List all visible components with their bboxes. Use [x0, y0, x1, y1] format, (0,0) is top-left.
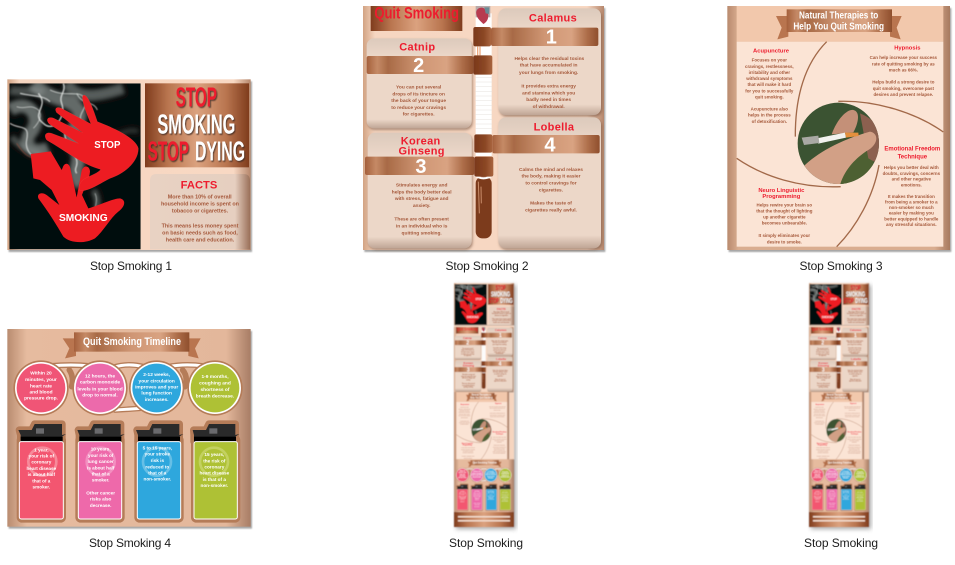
text: Emotional Freedom Technique: and other negative [892, 177, 932, 182]
card: Lobella: Lobella [534, 121, 575, 133]
circle: 2-12 weeks: your circulation [139, 378, 175, 384]
circle: 1-9 months [187, 360, 243, 416]
facts text: tobacco or cigarettes. [172, 209, 229, 215]
card: Lobella: cigarettes. [539, 187, 564, 193]
lighter: 5 to 15 years: your stroke [145, 452, 170, 457]
panel: smoke photo with red hands [9, 83, 141, 249]
lighter: 1 year: your risk of [29, 454, 54, 459]
lighter: 1 year: smoker. [33, 484, 50, 489]
card: Catnip: drops of its tincture on [392, 91, 445, 97]
central tube [474, 6, 493, 238]
card: Catnip: the back of your tongue [391, 98, 446, 104]
text: Acupuncture: quit smoking. [755, 94, 784, 99]
facts text: More than 10% of overall [168, 195, 232, 201]
text: Acupuncture: helps in the process [748, 113, 791, 118]
text: Acupuncture: Acupuncture [753, 48, 790, 54]
card: Lobella: the body, making it easier [522, 174, 581, 180]
lighter: 15 years: non-smoker. [200, 483, 228, 488]
circle: 20 minutes: minutes, your [25, 377, 57, 383]
text: Emotional Freedom Technique: It makes the transition [888, 194, 935, 199]
circle: 12 hours: levels in your blood [77, 386, 123, 392]
card: Calamus: It provides extra energy [521, 83, 576, 89]
card: Catnip: for cigarettes. [403, 112, 435, 118]
card: Korean Ginseng: helps the body better deal [392, 190, 452, 196]
thumbnail: Stop Smoking 4 [7, 329, 252, 529]
facts text [161, 195, 239, 243]
card: Calamus: your lungs from smoking. [519, 70, 579, 76]
panel: facts [150, 174, 250, 249]
text: Neuro Linguistic Programming: that the thought of lighting [756, 209, 813, 214]
ribbon heading [63, 332, 201, 358]
card: Korean Ginseng: anxiety. [413, 203, 431, 209]
text: Hypnosis: rate of quitting smoking by as [872, 61, 935, 66]
lighter: 10 years: risks also [90, 497, 112, 502]
card: Calamus: Calamus [529, 13, 577, 25]
lighter: 15 years: heart disease [199, 471, 230, 476]
text: Emotional Freedom Technique [883, 147, 941, 227]
circle: 12 hours: carbon monoxide [80, 380, 120, 386]
hand label SMOKING: SMOKING [59, 213, 108, 224]
lighter: 1 year: that of a [32, 478, 51, 483]
heading banner: Quit Smoking [371, 3, 462, 31]
card: Calamus [473, 8, 601, 115]
text: Acupuncture: that will make it hard [747, 82, 791, 87]
circle: 2-12 weeks: increases. [145, 397, 169, 403]
text: Emotional Freedom Technique: non-smoker so much [889, 205, 934, 210]
card: Calamus: and stamina which you [522, 90, 575, 96]
lighter: 10 years: lung cancer [88, 459, 114, 464]
caption: Stop Smoking second copy: Stop Smoking [804, 536, 878, 550]
circle: 2-12 weeks: lung function [141, 391, 172, 397]
text: Acupuncture: Focuses on your [752, 58, 787, 63]
caption: Stop Smoking 3: Stop Smoking 3 [800, 259, 883, 273]
thumbnail: Stop Smoking full infographic, first copy [454, 283, 516, 529]
card: Korean Ginseng: with stress, fatigue and [394, 196, 449, 202]
text: Emotional Freedom Technique: emotions. [901, 182, 922, 187]
card: Korean Ginseng: quitting smoking. [402, 230, 442, 236]
text: Hypnosis [870, 46, 938, 97]
text: Acupuncture: withdrawal symptoms [745, 76, 793, 81]
card: Korean Ginseng: These are often present [394, 216, 449, 222]
facts text: This means less money spent [162, 223, 239, 229]
card: Lobella: 4 [544, 134, 556, 156]
card: Calamus: badly need in times [526, 97, 571, 103]
lighter: 1 year: coronary [31, 460, 52, 465]
facts text: health care and education. [166, 237, 235, 243]
lighter: 1 year: heart disease [26, 466, 57, 471]
facts text: on basic needs such as food, [162, 230, 238, 236]
lighter: 5 to 15 years [134, 424, 184, 523]
lighter: 10 years: is about half [87, 465, 115, 470]
icon: red hand STOP [45, 95, 138, 191]
ribbon heading: Quit Smoking Timeline [83, 336, 181, 348]
lighter: 15 years: is that of a [203, 477, 226, 482]
card: Lobella: to control cravings for [525, 180, 577, 186]
lighter: 15 years: 15 years, [204, 452, 224, 457]
facts heading: FACTS [181, 180, 218, 192]
card: Catnip [367, 38, 492, 128]
text: Emotional Freedom Technique: Technique [898, 155, 928, 161]
lighter: 10 years: 10 years, [91, 447, 111, 452]
text: Acupuncture: irritability and other [749, 70, 790, 75]
lighter: 5 to 15 years: non-smoker. [143, 477, 171, 482]
card: Catnip: You can put several [396, 85, 441, 91]
tube base [476, 177, 492, 238]
headline: Stop Smoking Stop Dying: STOP [148, 136, 189, 167]
card: Korean Ginseng [365, 133, 493, 248]
text: Hypnosis: quit smoking, overcome past [873, 86, 934, 91]
lighter: 15 years: the risk of [203, 458, 226, 463]
lighter: 10 years: smoker. [92, 478, 109, 483]
circle: 12 hours: drop to normal. [82, 393, 118, 399]
circle: 2-12 weeks: improves and your [135, 384, 178, 390]
circle: 1-9 months: breath decrease. [196, 393, 235, 399]
text: Acupuncture: of detoxification. [752, 119, 787, 124]
headline: Stop Smoking Stop Dying: DYING [195, 136, 245, 167]
headline: Stop Smoking Stop Dying: STOP [176, 82, 217, 113]
circle: 12 hours [72, 360, 128, 416]
iris curves [737, 42, 943, 247]
card: Lobella [474, 117, 601, 248]
ribbon heading [776, 9, 902, 39]
card: Lobella: Makes the taste of [530, 201, 572, 207]
lighter: 10 years: that of a [92, 471, 110, 476]
card: Catnip: to reduce your cravings [391, 105, 446, 111]
card: Lobella: cigarettes really awful. [525, 208, 578, 214]
text: Neuro Linguistic Programming: Neuro Linguistic [758, 188, 805, 194]
circle: 1-9 months: 1-9 months, [201, 374, 229, 380]
lighter: 5 to 15 years: risk is [151, 458, 164, 463]
card: Korean Ginseng: Ginseng [399, 146, 445, 158]
white connector bands [50, 365, 203, 410]
thumbnail: Stop Smoking 3 [727, 6, 951, 252]
lighter: 5 to 15 years: 5 to 15 years, [143, 445, 172, 450]
thumbnail: Stop Smoking full infographic, second copy [809, 283, 871, 529]
card: Calamus: 1 [546, 27, 557, 49]
ribbon heading: Natural Therapies to [799, 11, 878, 22]
lighter: 1 year: is about half [28, 472, 55, 477]
ribbon heading: Help You Quit Smoking [793, 21, 884, 32]
text: Acupuncture: cravings, restlessness, [745, 64, 794, 69]
card: Korean Ginseng: in an individual who is [396, 223, 448, 229]
thumbnail: Stop Smoking 2 [363, 3, 605, 252]
circle: 20 minutes: heart rate [30, 383, 52, 389]
text: Neuro Linguistic Programming: up another cigarette [763, 215, 806, 220]
lighter: 1 year: 1 year, [34, 447, 49, 452]
text: Neuro Linguistic Programming: becomes unbearable. [762, 220, 807, 225]
text: Acupuncture: Acupuncture also [751, 107, 788, 112]
card: Catnip: 2 [413, 55, 424, 77]
text: Neuro Linguistic Programming: Helps rewire your brain so [757, 202, 812, 207]
lighter: 10 years: your risk of [88, 453, 114, 458]
circle: 1-9 months: coughing and [199, 380, 231, 386]
card: Korean Ginseng: Korean [401, 136, 441, 148]
text: Neuro Linguistic Programming: It simply eliminates your [759, 233, 810, 238]
photo: hand with cigarette [797, 100, 880, 187]
text: Emotional Freedom Technique: easier by making you [889, 211, 934, 216]
card: Calamus: of withdrawal. [533, 104, 565, 110]
text: Emotional Freedom Technique: doubts, cravings, concerns [883, 171, 941, 176]
hand label STOP: STOP [94, 140, 121, 151]
text: Emotional Freedom Technique: better equipped to handle [884, 216, 939, 221]
card: Calamus: Helps clear the residual toxins [514, 56, 585, 62]
text: Neuro Linguistic Programming: Programming [762, 194, 801, 200]
caption: Stop Smoking 4: Stop Smoking 4 [89, 536, 171, 550]
text: Hypnosis: desires and prevent relapse. [873, 92, 933, 97]
text: Neuro Linguistic Programming [756, 188, 813, 244]
text: Neuro Linguistic Programming: desire to smoke. [767, 239, 802, 244]
heading banner: Quit Smoking: Quit Smoking [374, 3, 459, 22]
card: Korean Ginseng: 3 [415, 156, 427, 178]
text: Acupuncture [745, 48, 794, 124]
text: Emotional Freedom Technique: Emotional Freedom [884, 147, 940, 153]
lighter: 10 years: Other cancer [86, 490, 115, 495]
text: Emotional Freedom Technique: any stressful situations. [886, 222, 937, 227]
thumbnail: Stop Smoking 1 [7, 79, 252, 252]
text: Hypnosis: Hypnosis [894, 46, 920, 52]
facts text: household income is spent on [161, 202, 239, 208]
circle: 2-12 weeks [129, 360, 184, 416]
text: Emotional Freedom Technique: from being a smoker to a [885, 200, 938, 205]
lighter: 15 years: coronary [204, 464, 225, 469]
lighter: 15 years [191, 424, 240, 523]
panel: headline banner [145, 82, 249, 167]
circle: 20 minutes: pressure drop. [24, 396, 59, 402]
headline: Stop Smoking Stop Dying: SMOKING [157, 109, 235, 140]
lighter: 5 to 15 years: that of a [148, 470, 167, 475]
caption: Stop Smoking 2: Stop Smoking 2 [446, 259, 529, 273]
lighter: 5 to 15 years: reduced to [145, 464, 169, 469]
circle: 20 minutes [13, 360, 69, 416]
text: Emotional Freedom Technique: Helps you better deal with [884, 165, 939, 170]
card: Calamus: that have accumulated in [520, 63, 578, 69]
card: Korean Ginseng: Stimulates energy and [396, 183, 447, 189]
lighter: 10 years [75, 424, 125, 523]
caption: Stop Smoking first copy: Stop Smoking [449, 536, 523, 550]
lighter: 10 years: decrease. [90, 503, 111, 508]
circle: 12 hours: 12 hours, the [85, 373, 115, 379]
text: Hypnosis: Can help increase your success [870, 55, 938, 60]
circle: 2-12 weeks: 2-12 weeks, [143, 372, 171, 378]
text: Acupuncture: for you to successfully [745, 88, 794, 93]
headline: Stop Smoking Stop Dying [148, 82, 245, 167]
card: Lobella: Calms the mind and relaxes [519, 167, 583, 173]
caption: Stop Smoking 1: Stop Smoking 1 [90, 259, 172, 273]
circle: 1-9 months: shortness of [201, 387, 230, 393]
icon: red hand SMOKING [31, 151, 124, 242]
lighter: 1 year [17, 424, 66, 523]
text: Hypnosis: Helps build a strong desire to [872, 80, 935, 85]
card: Catnip: Catnip [399, 42, 435, 54]
text: Hypnosis: much as 66%. [889, 67, 918, 72]
circle: 20 minutes: and blood [29, 389, 53, 395]
circle: 20 minutes: Within 20 [30, 371, 52, 377]
